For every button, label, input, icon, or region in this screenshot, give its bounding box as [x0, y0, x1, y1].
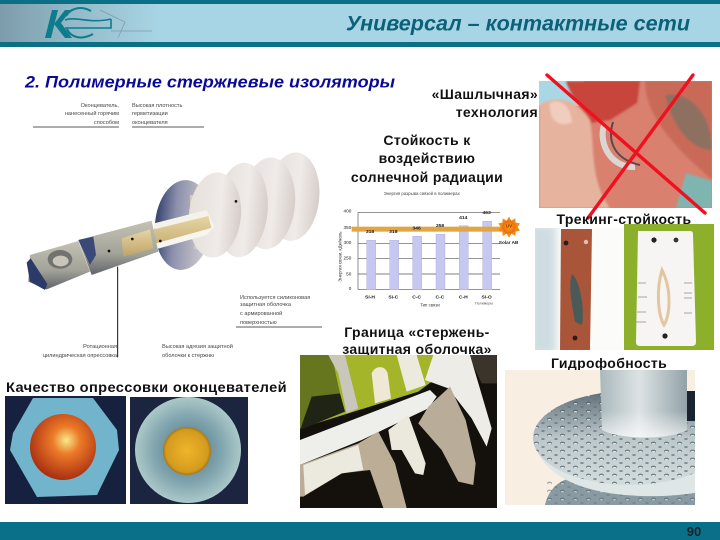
photo: rod and housing boundary	[300, 355, 497, 508]
callout: insulator captions: Используется силиконовая	[240, 295, 310, 301]
bar chart: UV resistance: Si-H	[365, 294, 375, 300]
label: tracking resistance: Трекинг-стойкость	[557, 211, 691, 227]
bar chart: UV resistance: Si-O	[482, 294, 492, 300]
bar chart: UV resistance: 0	[349, 286, 352, 291]
icon: sun: UV	[506, 224, 512, 229]
bar chart: UV resistance: Энергия связи, кДж/моль	[337, 231, 342, 282]
insulator cutaway illustration	[27, 150, 323, 357]
callout: insulator captions: оболочки к стержню	[162, 353, 214, 359]
logo	[45, 8, 152, 38]
bar chart: UV resistance: Тип связи	[420, 303, 440, 308]
bar chart: UV resistance: 300	[344, 240, 352, 245]
photo: crimp poor	[5, 396, 126, 504]
bar chart: UV resistance: 350	[344, 225, 352, 230]
callout: insulator captions: поверхностью	[240, 320, 277, 326]
photo: crimp good	[130, 397, 248, 504]
callout: top left captions: оконцевателя	[132, 120, 168, 126]
callout: insulator captions: Высокая адгезия защитной	[162, 343, 233, 350]
label: crimp quality: Качество опрессовки оконцевателей	[6, 379, 287, 395]
label: rod and housing boundary: Граница «стержень-	[344, 324, 490, 340]
photo: tracking sample, passed	[624, 224, 714, 350]
photo: tracking sample, failed	[535, 228, 592, 350]
bar chart: UV resistance	[337, 191, 520, 308]
bar chart: UV resistance: 318	[366, 229, 374, 235]
bar chart: UV resistance: 400	[344, 208, 352, 213]
callout: insulator captions: цилиндрическая опрессовка	[43, 353, 118, 359]
callout: top left captions: Высокая плотность	[132, 103, 182, 109]
label: solar radiation resistance	[351, 132, 503, 185]
bar chart: UV resistance: 358	[436, 223, 444, 229]
lug	[28, 241, 90, 289]
bar chart: UV resistance: C-H	[459, 294, 468, 300]
bar chart: UV resistance: Si-C	[388, 294, 399, 300]
label: kebab technology	[432, 86, 538, 120]
bar chart: UV resistance: 463	[482, 210, 491, 216]
callout: insulator captions: Ротационная	[83, 344, 117, 350]
callout: top left captions: Оконцеватель,	[81, 103, 119, 109]
red cross	[547, 75, 705, 218]
callout: insulator captions: защитная оболочка	[240, 302, 292, 308]
label: kebab technology: «Шашлычная»	[432, 86, 538, 102]
callout: top left captions: способом	[94, 120, 119, 126]
header band	[0, 0, 720, 47]
label: solar radiation resistance: Стойкость к	[383, 132, 471, 148]
bar chart: UV resistance: 414	[459, 215, 468, 221]
callout: top left captions: герметизации	[132, 111, 168, 117]
callout: insulator captions	[43, 295, 322, 359]
callout: insulator captions: с армированной	[240, 310, 282, 317]
title: Универсал – контактные сети	[346, 12, 690, 36]
section heading: 2. Полимерные стержневые изоляторы	[24, 72, 396, 92]
rod	[154, 210, 215, 246]
bar chart: UV resistance: 346	[412, 225, 421, 231]
pointers	[235, 200, 237, 203]
label: solar radiation resistance: солнечной радиации	[351, 169, 503, 185]
bar chart: UV resistance: C-C	[412, 294, 421, 300]
callout: top left captions: нанесенный горячим	[65, 110, 119, 117]
bar chart: UV resistance: Энергия разрыва связей в полимерах	[384, 191, 461, 196]
bar chart: UV resistance: 50	[346, 271, 352, 276]
label: rod and housing boundary: защитная оболочка»	[342, 341, 492, 357]
bar chart: UV resistance: Полимеры	[475, 302, 493, 306]
footer band	[0, 522, 720, 540]
bar chart: UV resistance: C-C	[436, 294, 445, 300]
page number: 90	[687, 524, 701, 539]
bar chart: UV resistance: 318	[389, 229, 398, 235]
crimp body	[78, 221, 158, 275]
icon: sun: Solar AB	[499, 240, 519, 245]
icon: sun	[498, 217, 520, 245]
bar chart: UV resistance: 250	[344, 255, 352, 260]
photo: hydrophobic surface	[505, 370, 695, 505]
label: hydrophobicity: Гидрофобность	[551, 355, 667, 371]
label: solar radiation resistance: воздействию	[379, 150, 475, 166]
label: kebab technology: технология	[456, 104, 538, 120]
callout: top left captions	[33, 103, 204, 127]
sheds	[151, 150, 323, 272]
label: rod and housing boundary	[342, 324, 492, 357]
photo: crossed out kebab technology	[539, 75, 712, 218]
